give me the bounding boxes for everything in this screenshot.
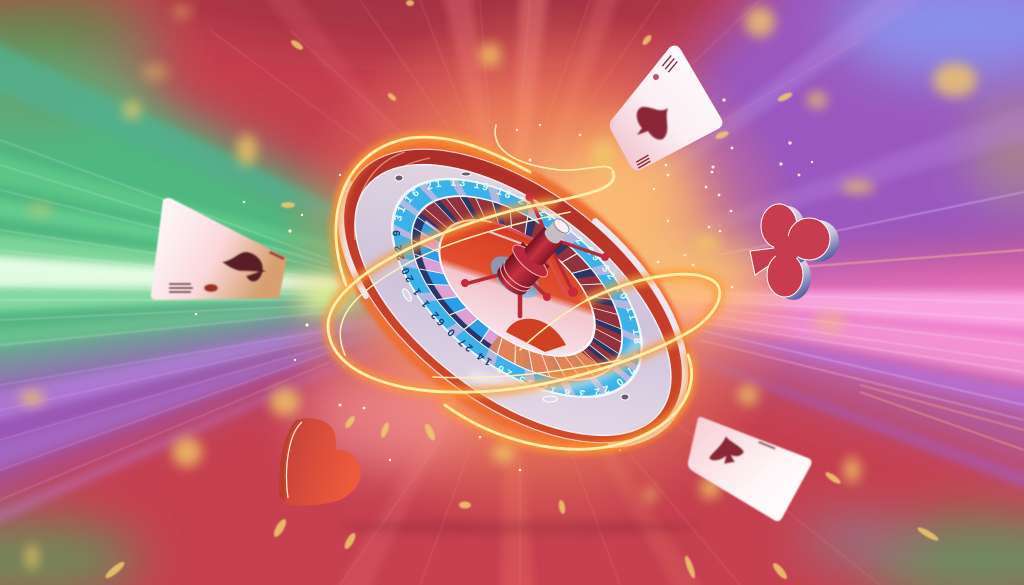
arm tips	[461, 192, 609, 301]
ground shadow	[340, 520, 700, 534]
corner index bottom	[636, 154, 651, 169]
icon: club suit	[750, 204, 839, 300]
cone reflection dome	[506, 319, 566, 352]
number labels	[364, 146, 670, 430]
inner faint ring	[340, 125, 620, 378]
card: blurred spade card bottom right	[688, 417, 812, 521]
red bowl	[292, 91, 734, 501]
silver plate	[308, 112, 718, 488]
hub body	[490, 207, 581, 303]
blue hub shadow	[484, 248, 546, 306]
club face	[750, 204, 830, 297]
spade pip	[222, 252, 266, 282]
silver cap	[542, 220, 568, 246]
icon: heart suit	[279, 418, 361, 505]
wheel body glow rim	[278, 78, 748, 514]
plate bolts	[395, 172, 629, 402]
club extrusion	[769, 206, 839, 300]
number ring and pockets: 16 21 13 19 18 20 24 28 2 29 32 10 11 18 6 7 0 22 3 8 12 35 26 14 27 0 62 1 1 20 22 9 31	[392, 178, 641, 398]
card: spade card top right	[610, 46, 722, 170]
silver outer lip	[287, 87, 739, 505]
spade pip	[637, 107, 668, 140]
sparkle dots	[195, 98, 813, 471]
pockets	[397, 177, 637, 399]
glowing orbit rings	[328, 125, 720, 449]
glow wash over lower ring	[470, 340, 640, 387]
spade pip	[709, 436, 744, 464]
spindle arms	[465, 197, 605, 316]
corner index	[169, 283, 218, 293]
number ring	[367, 149, 667, 427]
roulette wheel	[332, 140, 692, 453]
dark swirl highlights	[355, 152, 430, 245]
top right index	[269, 251, 285, 260]
corner index	[758, 441, 776, 450]
ring core	[328, 137, 720, 449]
corner index top	[653, 55, 678, 80]
card: blurred spade card left	[151, 198, 287, 300]
spindle turret	[461, 192, 609, 316]
ring glow	[328, 137, 720, 449]
wheel cone	[415, 194, 619, 382]
central halo	[270, 0, 810, 540]
